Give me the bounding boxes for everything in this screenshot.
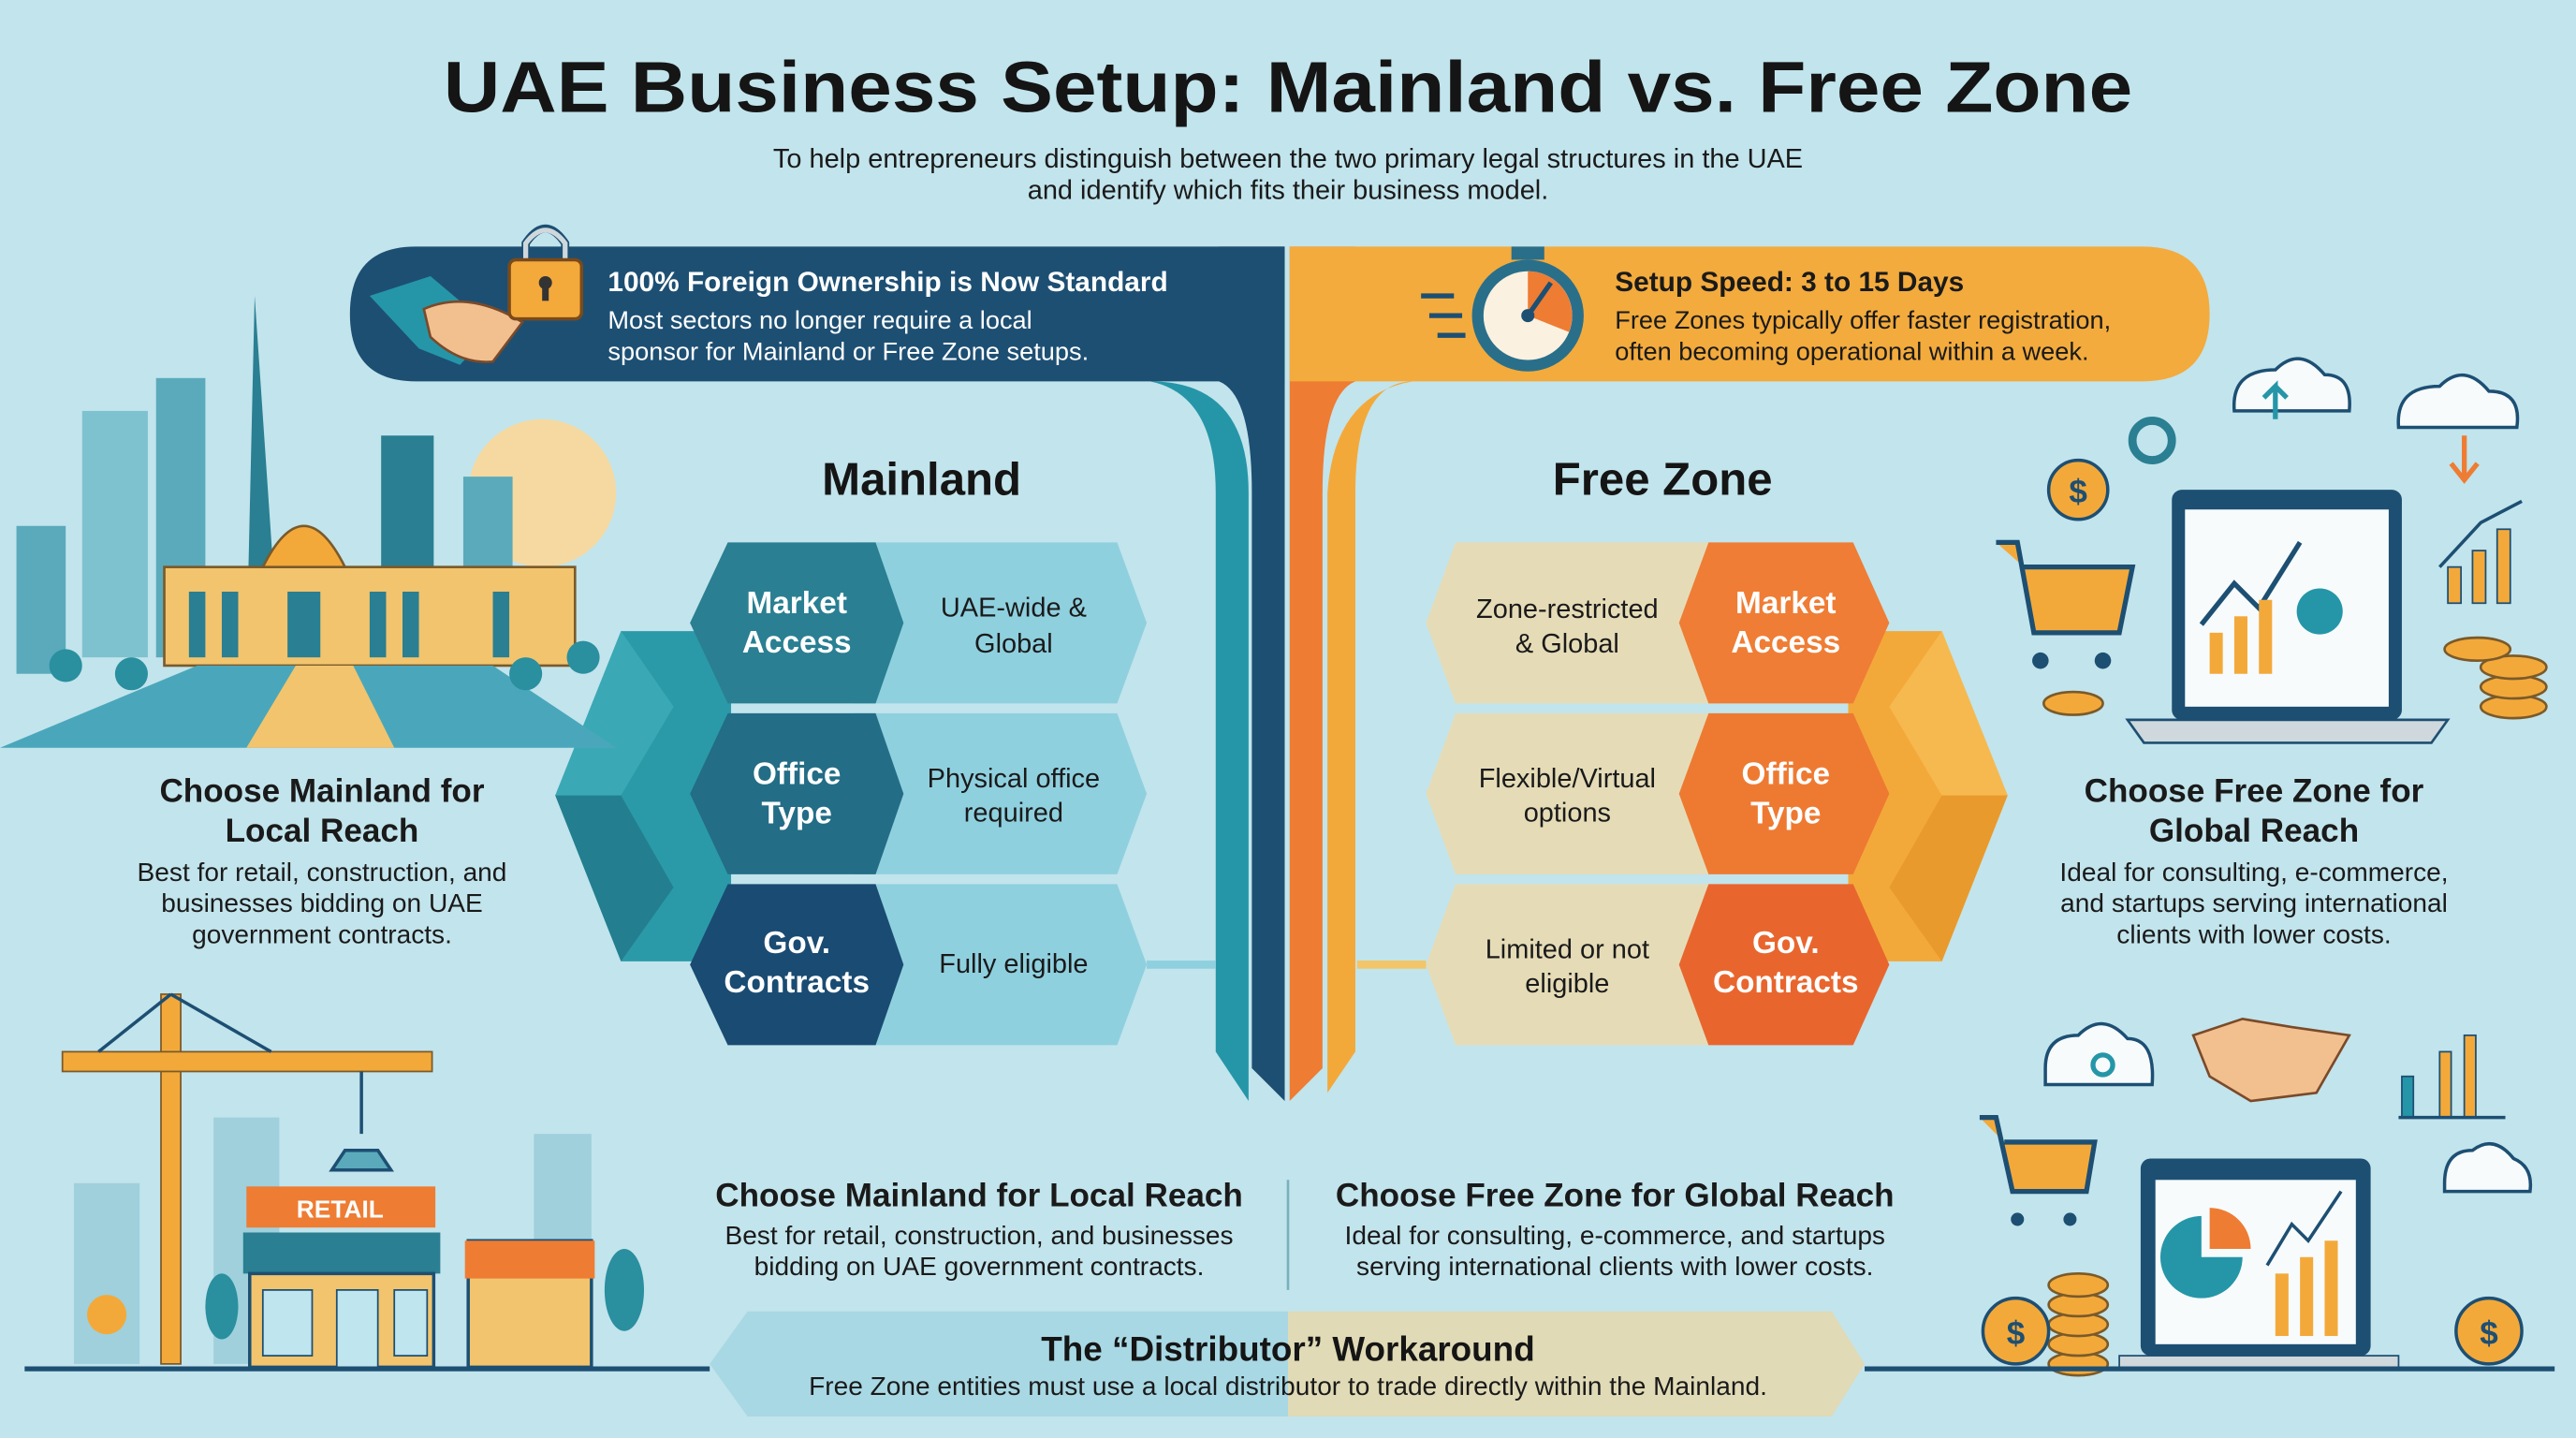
row: office type: Type [1750, 796, 1821, 830]
row: gov contracts [690, 884, 1147, 1045]
text block: choose free zone (right): Choose Free Zone for [2085, 773, 2424, 810]
icon: stopwatch [1421, 246, 1584, 372]
text block: choose mainland (left): Choose Mainland for [159, 773, 485, 810]
row: office type: required [964, 799, 1063, 829]
row: market access [690, 542, 1147, 703]
row: gov contracts: Limited or not [1486, 934, 1649, 964]
illustration: handshake, cloud, laptop and coins (bottom right): $ [2480, 1315, 2498, 1352]
illustration: crane and retail shops (bottom left) [63, 994, 644, 1367]
panel: mainland comparison [555, 542, 1216, 1045]
text block: choose free zone (right): Global Reach [2149, 813, 2359, 849]
illustration: city skyline with mosque [0, 296, 616, 748]
text block: choose mainland (left): businesses bidding on UAE [161, 888, 483, 917]
text block: choose free zone (right): and startups serving international [2060, 888, 2448, 917]
row: market access: & Global [1515, 629, 1619, 659]
central flow band: mainland [1150, 246, 1284, 1101]
callout: distributor workaround: Free Zone entities must use a local distributor to trade directly within the Mainland. [809, 1372, 1767, 1401]
row: gov contracts: Fully eligible [939, 949, 1089, 979]
row: gov contracts: Contracts [1713, 965, 1859, 1000]
row: gov contracts: eligible [1525, 969, 1609, 999]
subtitle: To help entrepreneurs distinguish between the two primary legal structures in the UAE [773, 144, 1803, 174]
text block: bottom free zone summary: Choose Free Zone for Global Reach [1336, 1177, 1895, 1213]
row: office type: Office [1742, 756, 1830, 791]
row: gov contracts: Gov. [763, 926, 830, 961]
row: office type [1426, 713, 1889, 874]
subtitle: and identify which fits their business model. [1028, 176, 1548, 206]
row: market access: Access [1731, 625, 1840, 660]
text block: choose mainland (left): Best for retail, construction, and [138, 858, 506, 887]
row: office type: Office [753, 756, 841, 791]
heading: Free Zone: Free Zone [1553, 454, 1773, 505]
row: gov contracts: Contracts [724, 965, 870, 1000]
text block: bottom mainland summary: bidding on UAE government contracts. [754, 1252, 1204, 1281]
row: market access [1426, 542, 1889, 703]
text block: bottom free zone summary [1336, 1177, 1895, 1281]
banner: setup speed [1290, 246, 2210, 381]
text block: choose mainland (left) [138, 773, 506, 949]
icon: padlock [509, 228, 581, 319]
illustration: handshake, cloud, laptop and coins (bottom right) [1980, 1019, 2530, 1375]
illustration: laptop with charts and ecommerce (right top) [1996, 359, 2546, 742]
illustration: handshake, cloud, laptop and coins (bottom right): $ [2007, 1315, 2026, 1352]
text block: bottom mainland summary: Choose Mainland for Local Reach [715, 1177, 1243, 1213]
text block: bottom free zone summary: Ideal for consulting, e-commerce, and startups [1345, 1221, 1885, 1250]
text block: choose mainland (left): Local Reach [226, 813, 418, 849]
callout: distributor workaround [710, 1312, 1865, 1416]
big hex right [1848, 631, 2008, 961]
row: market access: Zone-restricted [1476, 594, 1659, 624]
icon: handshake [370, 276, 522, 365]
row: gov contracts [1426, 884, 1889, 1045]
row: market access: Access [742, 625, 852, 660]
panel: free zone comparison [1357, 542, 2008, 1045]
heading: Mainland: Mainland [822, 454, 1021, 505]
banner text: 100% Foreign Ownership is Now Standard [607, 267, 1168, 298]
row: gov contracts: Gov. [1752, 926, 1820, 961]
central flow band: free zone [1290, 246, 1412, 1101]
row: office type: Flexible/Virtual [1479, 764, 1656, 794]
subtitle [773, 144, 1803, 206]
title: UAE Business Setup: Mainland vs. Free Zone [444, 47, 2132, 127]
ground lines [24, 1368, 2554, 1371]
text block: bottom mainland summary: Best for retail, construction, and businesses [724, 1221, 1234, 1250]
text block: bottom free zone summary: serving international clients with lower costs. [1356, 1252, 1873, 1281]
row: market access: Global [974, 629, 1053, 659]
banner: setup speed: Free Zones typically offer faster registration, [1615, 305, 2111, 334]
banner: setup speed: often becoming operational within a week. [1615, 337, 2089, 366]
row: market access: UAE-wide & [941, 593, 1087, 623]
banner: foreign ownership [350, 228, 1284, 381]
text block: choose mainland (left): government contracts. [192, 920, 452, 949]
row: office type: Physical office [928, 764, 1100, 794]
banner: setup speed: Setup Speed: 3 to 15 Days [1615, 267, 1964, 298]
text block: choose free zone (right): Ideal for consulting, e-commerce, [2059, 858, 2449, 887]
row: office type [690, 713, 1147, 874]
row: market access: Market [746, 586, 847, 621]
banner text [607, 267, 1168, 366]
banner text: sponsor for Mainland or Free Zone setups. [607, 337, 1089, 366]
row: market access: Market [1735, 586, 1837, 621]
banner text: Most sectors no longer require a local [607, 305, 1032, 334]
text block: bottom mainland summary [715, 1177, 1243, 1281]
row: office type: options [1524, 799, 1611, 829]
text block: choose free zone (right): clients with lower costs. [2116, 920, 2392, 949]
illustration: crane and retail shops (bottom left): RETAIL [297, 1196, 384, 1224]
row: office type: Type [762, 796, 832, 830]
big hex left [555, 631, 731, 961]
text block: choose free zone (right) [2059, 773, 2449, 949]
callout: distributor workaround: The “Distributor” Workaround [1041, 1329, 1535, 1368]
illustration: laptop with charts and ecommerce (right top): $ [2069, 474, 2087, 510]
